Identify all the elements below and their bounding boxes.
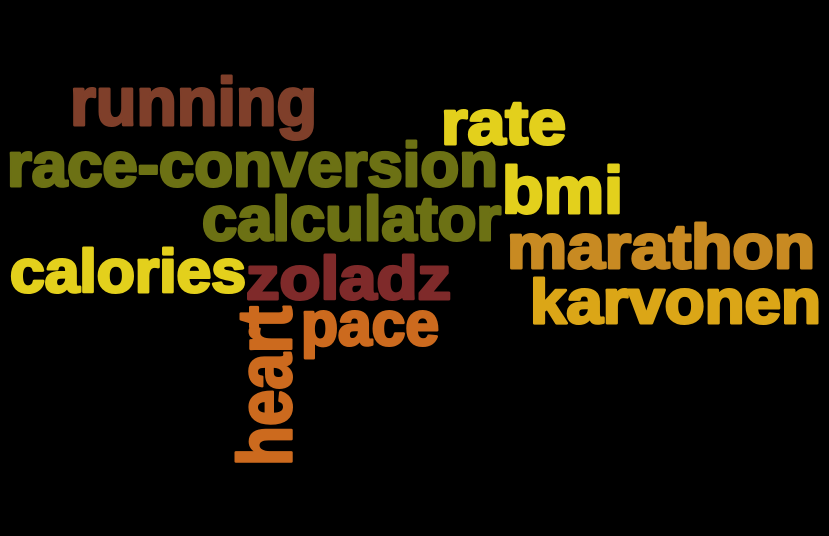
word: pace: pace xyxy=(301,290,439,359)
word: race-conversion: race-conversion xyxy=(7,131,498,200)
word: calculator: calculator xyxy=(202,185,501,254)
word: zoladz: zoladz xyxy=(246,245,451,312)
word: calories: calories xyxy=(10,238,246,305)
word: bmi: bmi xyxy=(502,153,623,227)
word: marathon: marathon xyxy=(507,213,815,282)
word: karvonen: karvonen xyxy=(530,268,821,337)
word: rate: rate xyxy=(441,89,566,158)
word: heart: heart xyxy=(223,306,308,466)
word: running: running xyxy=(70,64,317,140)
